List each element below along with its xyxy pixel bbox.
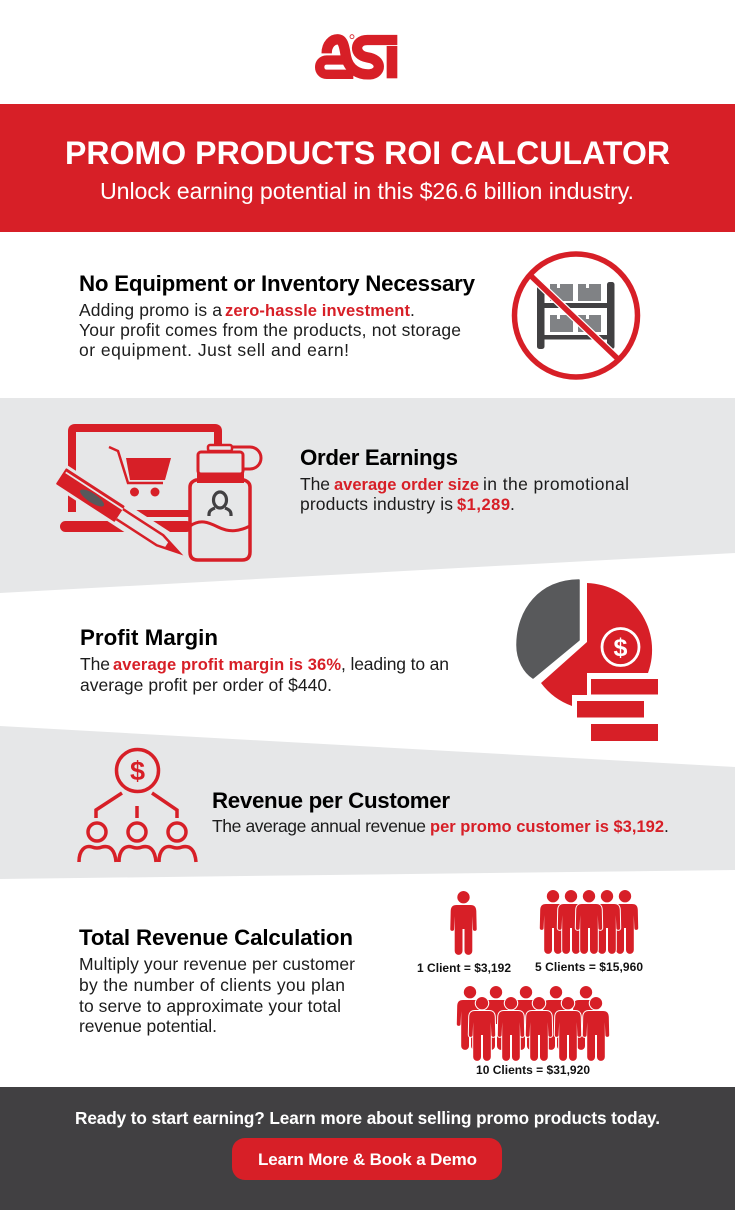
heading: Order Earnings <box>300 445 458 470</box>
call to action text: Ready to start earning? Learn more about selling promo products today. <box>75 1108 660 1128</box>
text block: Your profit comes from the products, not storage <box>79 320 461 340</box>
text block: by the number of clients you plan <box>79 975 345 995</box>
text block: The average annual revenue <box>212 816 426 836</box>
icon: pen <box>52 464 186 563</box>
text block: to serve to approximate your total <box>79 996 341 1016</box>
icon: customers network <box>79 750 196 862</box>
text block: Multiply your revenue per customer <box>79 954 355 974</box>
button <box>232 1138 502 1180</box>
panel: revenue per customer band <box>0 726 735 879</box>
text block: . <box>410 300 415 320</box>
text block: in the promotional <box>483 474 629 494</box>
text block: zero-hassle investment <box>225 302 410 320</box>
text block: $1,289 <box>457 496 510 514</box>
text block: per promo customer is $3,192 <box>430 818 664 836</box>
panel: order earnings text <box>300 445 629 514</box>
caption: 1 Client = $3,192 <box>417 961 511 975</box>
icon: laptop, pen and bottle <box>52 428 261 563</box>
button: Learn More & Book a Demo <box>258 1150 477 1169</box>
text block: average profit margin is 36% <box>113 656 341 674</box>
title: PROMO PRODUCTS ROI CALCULATOR <box>65 135 670 171</box>
panel: no equipment <box>79 271 476 360</box>
heading: No Equipment or Inventory Necessary <box>79 271 476 296</box>
text block: average profit per order of $440. <box>80 675 332 695</box>
subtitle: Unlock earning potential in this $26.6 billion industry. <box>100 178 634 204</box>
icon: pie chart with coins <box>517 580 658 741</box>
icon: laptop <box>60 428 218 532</box>
icon: 1 client <box>417 891 511 975</box>
text block: or equipment. Just sell and earn! <box>79 340 349 360</box>
text block: products industry is <box>300 494 453 514</box>
icon: 10 clients <box>457 986 609 1077</box>
text block <box>79 300 461 360</box>
icon: pie chart with coins: $ <box>614 634 628 662</box>
caption: 5 Clients = $15,960 <box>535 960 643 974</box>
icon: customers network: $ <box>130 756 145 786</box>
text block <box>300 474 629 514</box>
heading: Revenue per Customer <box>212 788 450 813</box>
panel: profit margin <box>80 625 449 695</box>
text block: . <box>664 816 669 836</box>
caption: 10 Clients = $31,920 <box>476 1063 590 1077</box>
icon: no inventory shelf <box>514 254 638 377</box>
text block: The <box>300 474 330 494</box>
header banner <box>0 104 735 232</box>
icon: 5 clients <box>535 890 643 974</box>
text block <box>80 654 449 695</box>
text block <box>79 954 355 1036</box>
heading: Total Revenue Calculation <box>79 925 353 950</box>
panel: order earnings band <box>0 398 735 593</box>
text block: . <box>510 494 515 514</box>
logo: ASI <box>320 35 397 78</box>
panel: revenue per customer text <box>212 788 669 836</box>
text block: Adding promo is a <box>79 300 222 320</box>
panel: total revenue calculation <box>79 925 355 1036</box>
text block: The <box>80 654 110 674</box>
icon: bottle <box>190 445 261 560</box>
heading: Profit Margin <box>80 625 218 650</box>
text block: , leading to an <box>341 654 449 674</box>
text block: revenue potential. <box>79 1016 217 1036</box>
text block <box>212 816 669 836</box>
text block: average order size <box>334 476 479 494</box>
footer <box>0 1087 735 1210</box>
